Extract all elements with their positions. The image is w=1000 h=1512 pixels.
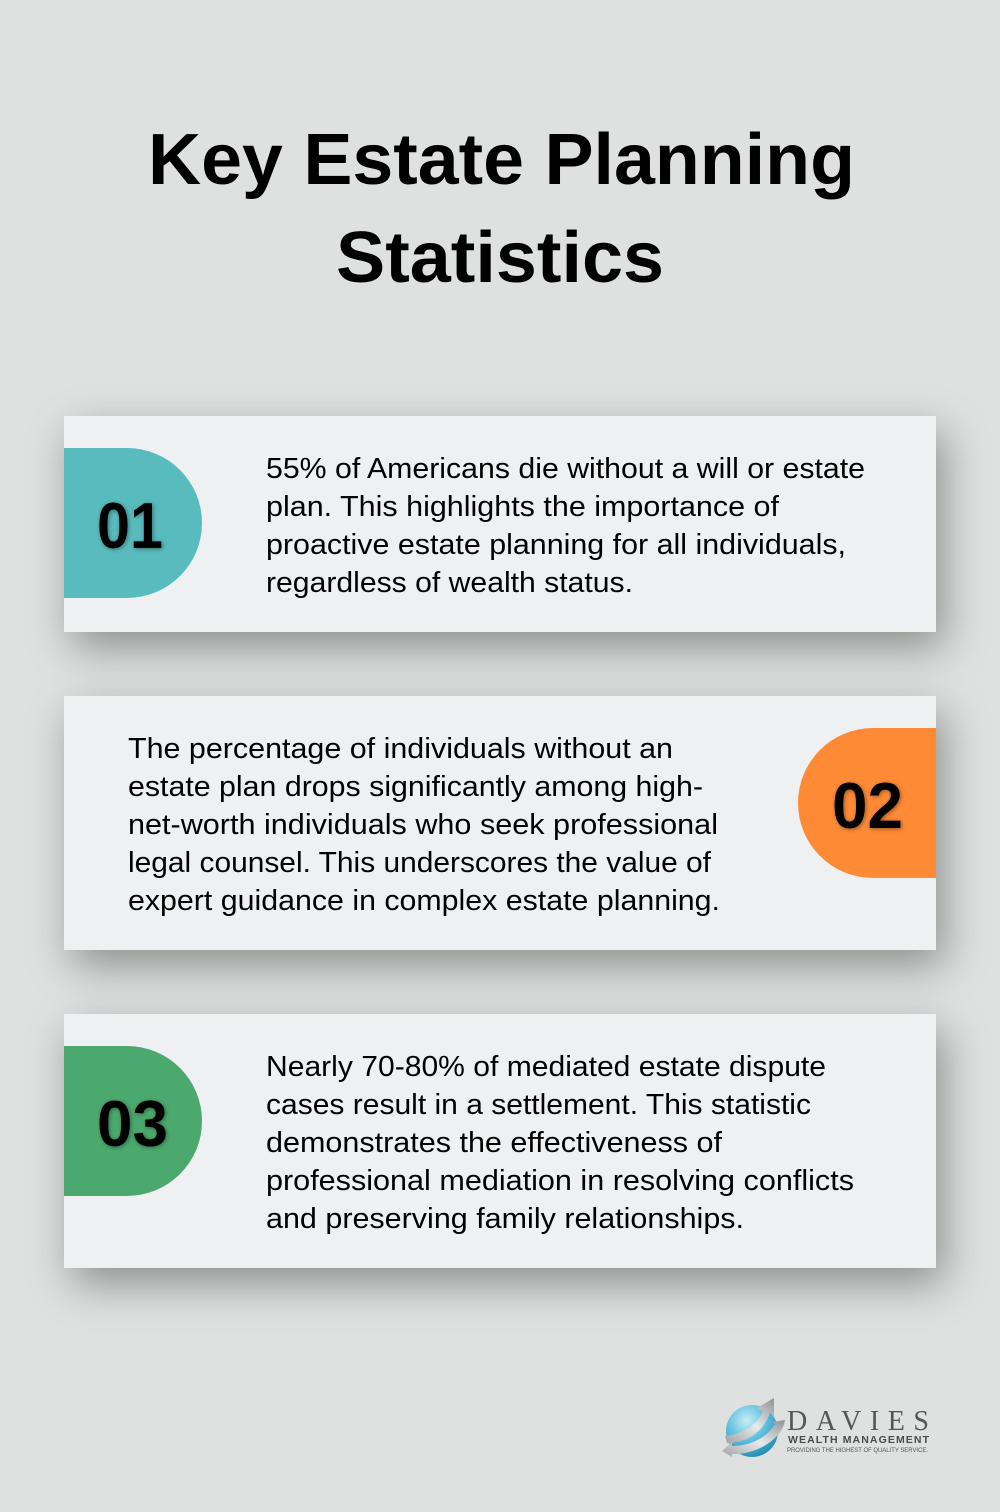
text block 2: expert guidance in complex estate planning. — [128, 885, 720, 917]
icon: globe with arrows — [722, 1398, 785, 1457]
text block 3 — [266, 1051, 854, 1235]
text block 2 — [128, 733, 720, 917]
wordmark: DAVIES — [787, 1406, 929, 1437]
wordmark: PROVIDING THE HIGHEST OF QUALITY SERVICE. — [787, 1447, 928, 1454]
wordmark — [787, 1406, 930, 1454]
wordmark: WEALTH MANAGEMENT — [788, 1434, 930, 1446]
panel: card 2 background — [64, 696, 936, 950]
card 3: statistic 03 — [64, 1046, 854, 1235]
panel: card 1 background — [64, 416, 936, 632]
number badge 02 — [798, 728, 936, 878]
title — [148, 120, 855, 298]
text block 3: demonstrates the effectiveness of — [266, 1127, 722, 1159]
number badge 03 — [64, 1046, 202, 1196]
number badge 01 — [64, 448, 202, 598]
number badge 03: 03 — [97, 1087, 168, 1160]
text block 3: Nearly 70-80% of mediated estate dispute — [266, 1051, 826, 1083]
title: Statistics — [336, 218, 664, 298]
text block 2: net-worth individuals who seek professional — [128, 809, 718, 841]
text block 3: professional mediation in resolving conflicts — [266, 1165, 854, 1197]
text block 1: 55% of Americans die without a will or estate — [266, 453, 865, 485]
title: Key Estate Planning — [148, 120, 855, 200]
number badge 01: 01 — [97, 489, 163, 562]
text block 2: The percentage of individuals without an — [128, 733, 673, 765]
text block 2: legal counsel. This underscores the value of — [128, 847, 711, 879]
card 1: statistic 01 — [64, 448, 865, 599]
text block 3: and preserving family relationships. — [266, 1203, 744, 1235]
text block 3: cases result in a settlement. This statistic — [266, 1089, 811, 1121]
card 2: statistic 02 — [128, 728, 936, 917]
text block 1: regardless of wealth status. — [266, 567, 633, 599]
number badge 02: 02 — [832, 769, 903, 842]
text block 1: plan. This highlights the importance of — [266, 491, 779, 523]
panel: card 3 background — [64, 1014, 936, 1268]
text block 2: estate plan drops significantly among high- — [128, 771, 703, 803]
text block 1 — [266, 453, 865, 599]
logo: Davies Wealth Management — [722, 1398, 930, 1457]
text block 1: proactive estate planning for all individuals, — [266, 529, 846, 561]
